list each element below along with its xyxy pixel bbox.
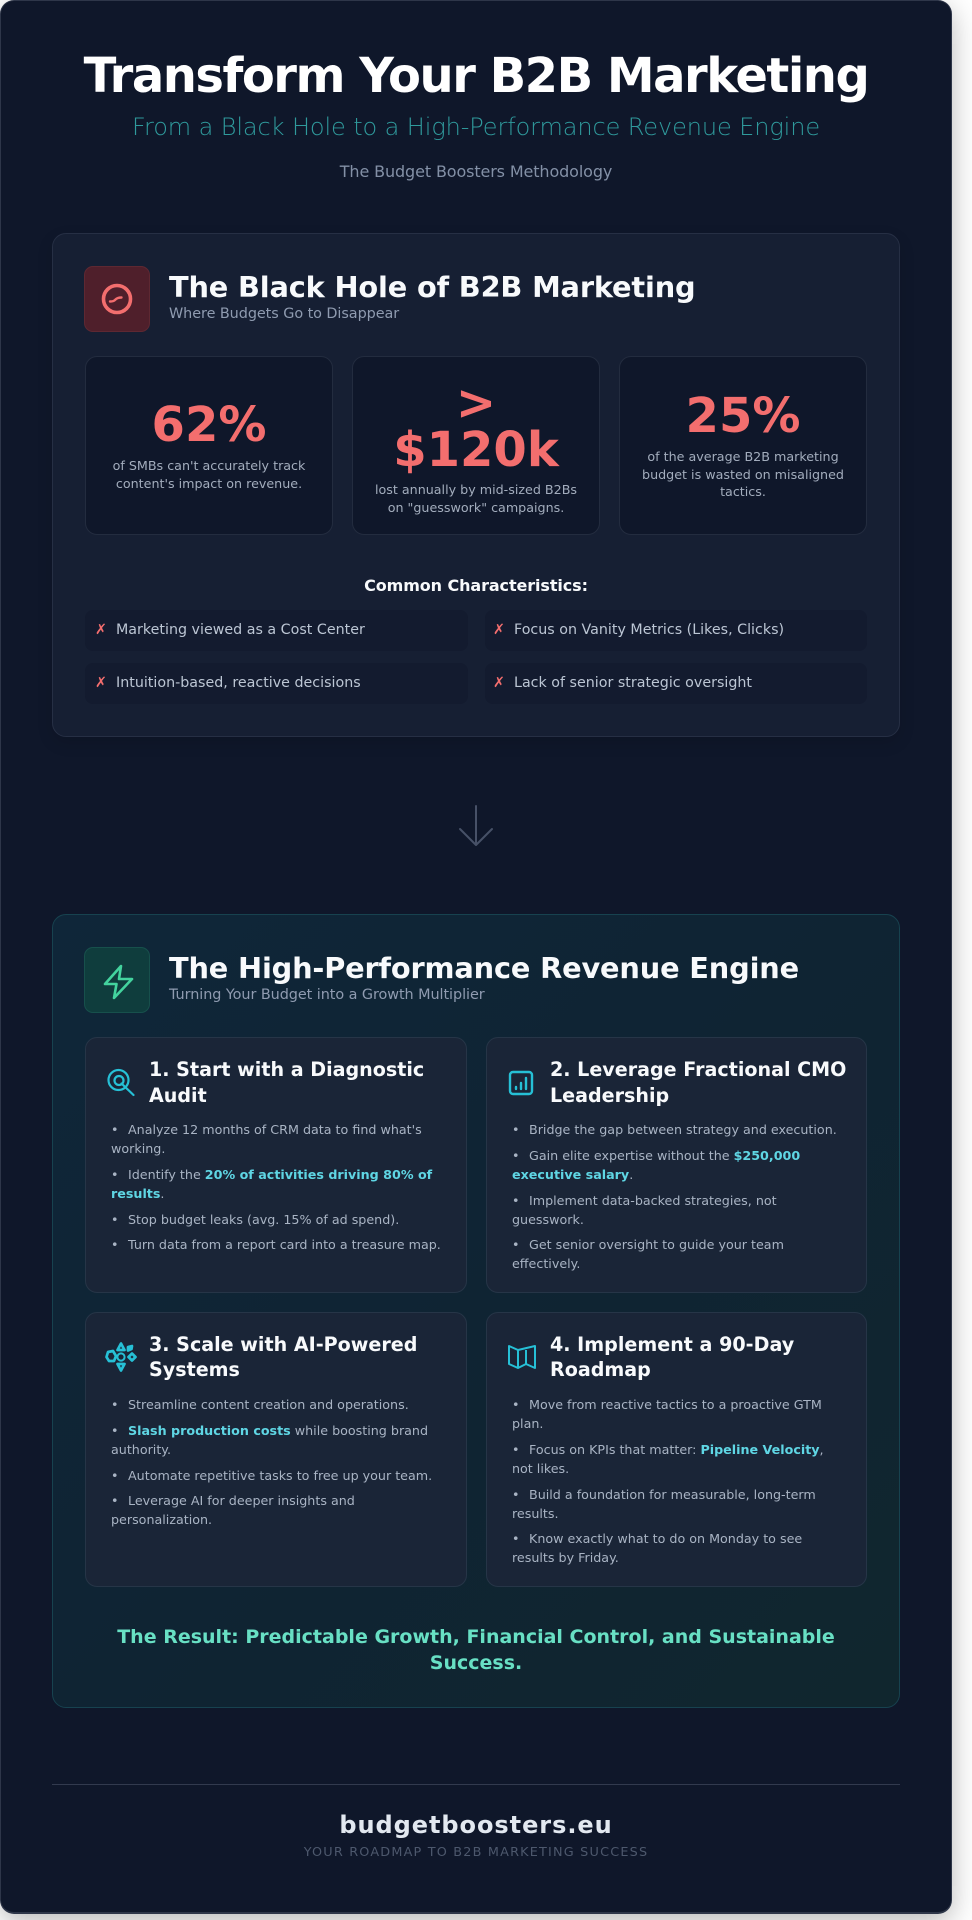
step 4 heading: Roadmap	[550, 1358, 651, 1381]
stat description: on "guesswork" campaigns.	[388, 500, 564, 515]
stat description: tactics.	[720, 484, 766, 499]
step 3 list: authority.	[111, 1442, 171, 1457]
step 2 heading	[550, 1058, 846, 1107]
step 3 list: Leverage AI for deeper insights and	[128, 1493, 355, 1508]
stat description	[642, 449, 844, 499]
stat number: 25%	[686, 388, 800, 444]
stat card: $120k	[352, 356, 600, 535]
title: Transform Your B2B Marketing	[84, 48, 868, 104]
step 4 list: Build a foundation for measurable, long-term	[529, 1487, 816, 1502]
icon: black hole	[84, 266, 150, 332]
step 3 list: Automate repetitive tasks to free up your team.	[128, 1468, 432, 1483]
step 2 list: •	[512, 1148, 519, 1163]
icon: lightning bolt	[84, 947, 150, 1013]
heading: revenue engine: The High-Performance Revenue Engine	[169, 951, 799, 985]
step 1 list: •	[111, 1237, 118, 1252]
step 4 list: Know exactly what to do on Monday to see	[529, 1531, 802, 1546]
step 4 list: Move from reactive tactics to a proactive GTM	[529, 1397, 822, 1412]
step 3 heading: 3. Scale with AI-Powered	[149, 1332, 417, 1356]
result statement: The Result: Predictable Growth, Financial Control, and Sustainable	[117, 1626, 835, 1648]
icon: map	[508, 1345, 536, 1369]
step 1 list: •	[111, 1122, 118, 1137]
step 4 list	[512, 1397, 824, 1565]
characteristic 1	[85, 610, 468, 651]
footer tagline: YOUR ROADMAP TO B2B MARKETING SUCCESS	[304, 1845, 648, 1860]
stat description	[113, 458, 306, 491]
result statement	[117, 1626, 835, 1674]
panel: revenue engine	[52, 914, 900, 1708]
step 2 list: •	[512, 1122, 519, 1137]
step 3 list	[111, 1397, 432, 1527]
step card 3: AI systems	[85, 1312, 467, 1587]
step 2 heading: Leadership	[550, 1084, 669, 1107]
footer brand: budgetboosters.eu	[339, 1811, 613, 1839]
step 4 list: •	[512, 1442, 519, 1457]
step 3 list: •	[111, 1468, 118, 1483]
result statement: Success.	[430, 1652, 522, 1674]
stat description	[375, 482, 577, 515]
step 1 list	[111, 1122, 441, 1252]
stat description: of SMBs can't accurately track	[113, 458, 305, 473]
step 1 list: Turn data from a report card into a treasure map.	[128, 1237, 441, 1252]
icon: magnifier target	[107, 1068, 135, 1096]
step 4 list: •	[512, 1397, 519, 1412]
step 3 list: •	[111, 1493, 118, 1508]
step 4 list: not likes.	[512, 1461, 569, 1476]
characteristic 2: ✗	[493, 622, 505, 638]
characteristic 1: ✗	[95, 622, 107, 638]
subheading: black hole: Where Budgets Go to Disappear	[169, 306, 399, 322]
step 1 list: working.	[111, 1141, 165, 1156]
stat description: lost annually by mid-sized B2Bs	[375, 482, 577, 497]
step 2 list: guesswork.	[512, 1212, 584, 1227]
step 1 list: •	[111, 1212, 118, 1227]
step 1 list: Analyze 12 months of CRM data to find what's	[128, 1122, 422, 1137]
step 2 list: executive salary.	[512, 1167, 633, 1182]
characteristics heading: Common Characteristics:	[364, 576, 588, 595]
stat number: $120k	[393, 422, 559, 478]
subtitle: From a Black Hole to a High-Performance Revenue Engine	[132, 113, 820, 141]
arrow: down	[459, 805, 493, 846]
step 1 heading	[149, 1058, 424, 1107]
characteristic 3: Intuition-based, reactive decisions	[116, 675, 361, 691]
step 2 list: Bridge the gap between strategy and execution.	[529, 1122, 837, 1137]
step 4 list: •	[512, 1487, 519, 1502]
step card 1: diagnostic audit	[85, 1037, 467, 1293]
characteristic 3	[85, 663, 468, 704]
step 3 list: personalization.	[111, 1512, 212, 1527]
step 3 list: Slash production costs while boosting brand	[128, 1423, 428, 1438]
step 1 list: results.	[111, 1186, 164, 1201]
stat card: 25%	[619, 356, 867, 535]
stat description: budget is wasted on misaligned	[642, 467, 844, 482]
step 1 heading: Audit	[149, 1084, 207, 1107]
step 4 list: results.	[512, 1506, 559, 1521]
characteristic 2	[485, 610, 867, 651]
step 4 list: results by Friday.	[512, 1550, 619, 1565]
characteristic 2: Focus on Vanity Metrics (Likes, Clicks)	[514, 622, 784, 638]
step 2 list: Get senior oversight to guide your team	[529, 1237, 784, 1252]
step 1 heading: 1. Start with a Diagnostic	[149, 1058, 424, 1081]
step 3 list: •	[111, 1397, 118, 1412]
step 3 list: Streamline content creation and operations.	[128, 1397, 409, 1412]
stat description: content's impact on revenue.	[116, 476, 302, 491]
panel: black hole	[52, 233, 900, 737]
characteristic 4	[485, 663, 867, 704]
step 2 list: Gain elite expertise without the $250,000	[529, 1148, 800, 1163]
characteristic 3: ✗	[95, 675, 107, 691]
characteristic 1: Marketing viewed as a Cost Center	[116, 622, 365, 638]
step 2 list: effectively.	[512, 1256, 580, 1271]
step 4 heading: 4. Implement a 90-Day	[550, 1332, 794, 1356]
stat number: 62%	[152, 396, 266, 452]
step 3 list: •	[111, 1423, 118, 1438]
characteristic 4: ✗	[493, 675, 505, 691]
footer divider	[52, 1784, 900, 1785]
stat number: >	[456, 375, 496, 431]
step 2 list: Implement data-backed strategies, not	[529, 1193, 777, 1208]
stat card: 62%	[85, 356, 333, 535]
step 4 list: •	[512, 1531, 519, 1546]
step card 4: 90-day roadmap	[486, 1312, 867, 1587]
step 2 heading: 2. Leverage Fractional CMO	[550, 1058, 846, 1081]
step 1 list: Identify the 20% of activities driving 80% of	[128, 1167, 432, 1182]
step card 2: fractional CMO	[486, 1037, 867, 1293]
subheading: revenue engine: Turning Your Budget into a Growth Multiplier	[169, 987, 485, 1003]
step 4 heading	[550, 1332, 794, 1381]
step 2 list	[512, 1122, 837, 1271]
step 2 list: •	[512, 1193, 519, 1208]
heading: black hole: The Black Hole of B2B Marketing	[169, 270, 696, 304]
stat description: of the average B2B marketing	[647, 449, 839, 464]
methodology line: The Budget Boosters Methodology	[340, 162, 612, 181]
step 2 list: •	[512, 1237, 519, 1252]
step 3 heading: Systems	[149, 1358, 240, 1381]
stat number	[393, 375, 560, 478]
step 1 list: •	[111, 1167, 118, 1182]
characteristic 4: Lack of senior strategic oversight	[514, 675, 752, 691]
step 4 list: plan.	[512, 1416, 543, 1431]
icon: bar chart	[508, 1070, 534, 1096]
icon: AI cluster	[105, 1342, 137, 1372]
step 3 heading	[149, 1332, 417, 1381]
step 1 list: Stop budget leaks (avg. 15% of ad spend).	[128, 1212, 399, 1227]
step 4 list: Focus on KPIs that matter: Pipeline Velocity,	[529, 1442, 824, 1457]
